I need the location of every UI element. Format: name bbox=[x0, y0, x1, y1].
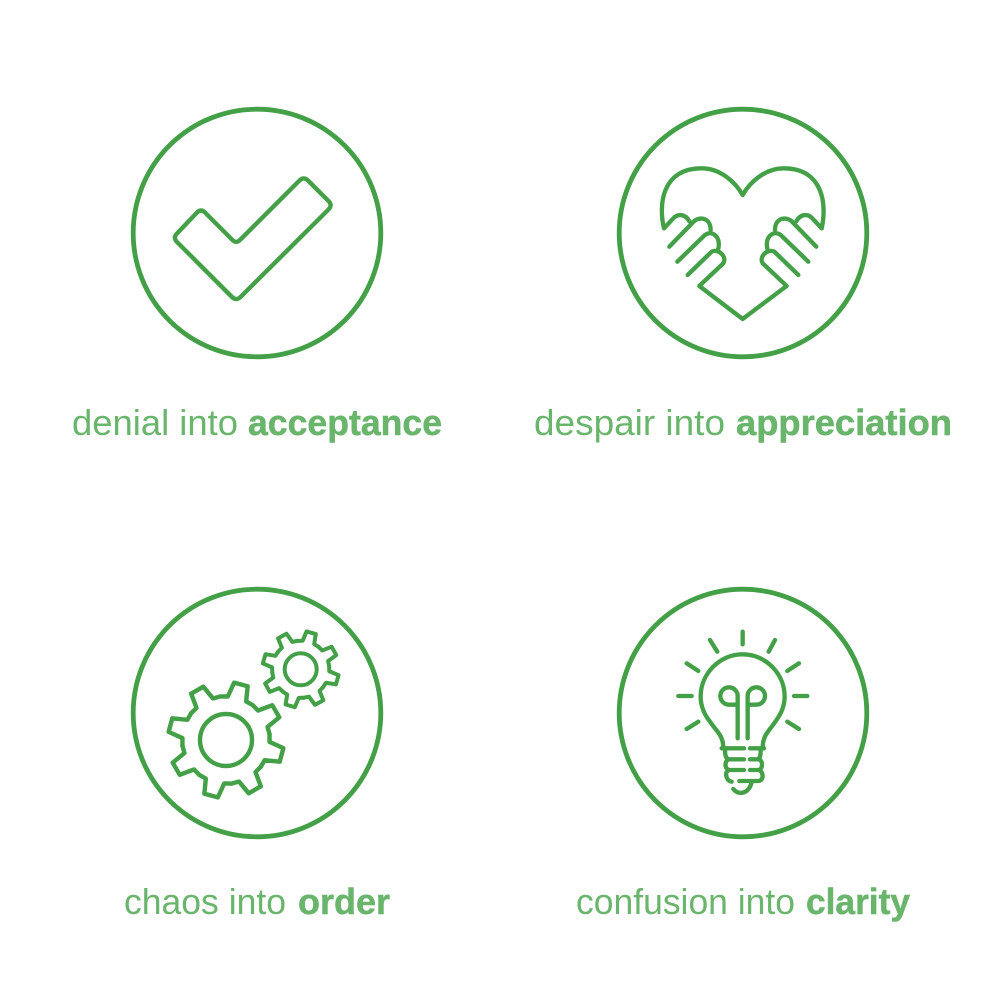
icon: check mark bbox=[175, 178, 331, 299]
caption: despair into appreciation: appreciation bbox=[736, 402, 952, 443]
caption: despair into appreciation: despair into bbox=[534, 402, 725, 443]
panel: denial into acceptance bbox=[72, 109, 442, 443]
icon circle: clarity bbox=[619, 589, 867, 837]
panel: chaos into order bbox=[124, 589, 390, 922]
caption: chaos into order: chaos into bbox=[124, 881, 286, 922]
icon circle: acceptance bbox=[133, 109, 381, 357]
caption: confusion into clarity: confusion into bbox=[576, 881, 795, 922]
panel: confusion into clarity bbox=[576, 589, 910, 922]
panel: despair into appreciation bbox=[534, 109, 952, 443]
caption: denial into acceptance: denial into bbox=[72, 402, 238, 443]
caption: denial into acceptance: acceptance bbox=[248, 402, 442, 443]
caption: chaos into order bbox=[124, 881, 390, 922]
caption: confusion into clarity bbox=[576, 881, 910, 922]
icon circle: order bbox=[133, 589, 381, 837]
caption: denial into acceptance bbox=[72, 402, 442, 443]
caption: chaos into order: order bbox=[298, 881, 390, 922]
caption: confusion into clarity: clarity bbox=[806, 881, 910, 922]
icon: small gear bbox=[261, 630, 340, 709]
icon: large gear bbox=[166, 680, 286, 800]
caption: despair into appreciation bbox=[534, 402, 952, 443]
icon: heart held by hands bbox=[662, 168, 824, 319]
icon: light bulb bbox=[678, 632, 807, 793]
icon circle: appreciation bbox=[619, 109, 867, 357]
